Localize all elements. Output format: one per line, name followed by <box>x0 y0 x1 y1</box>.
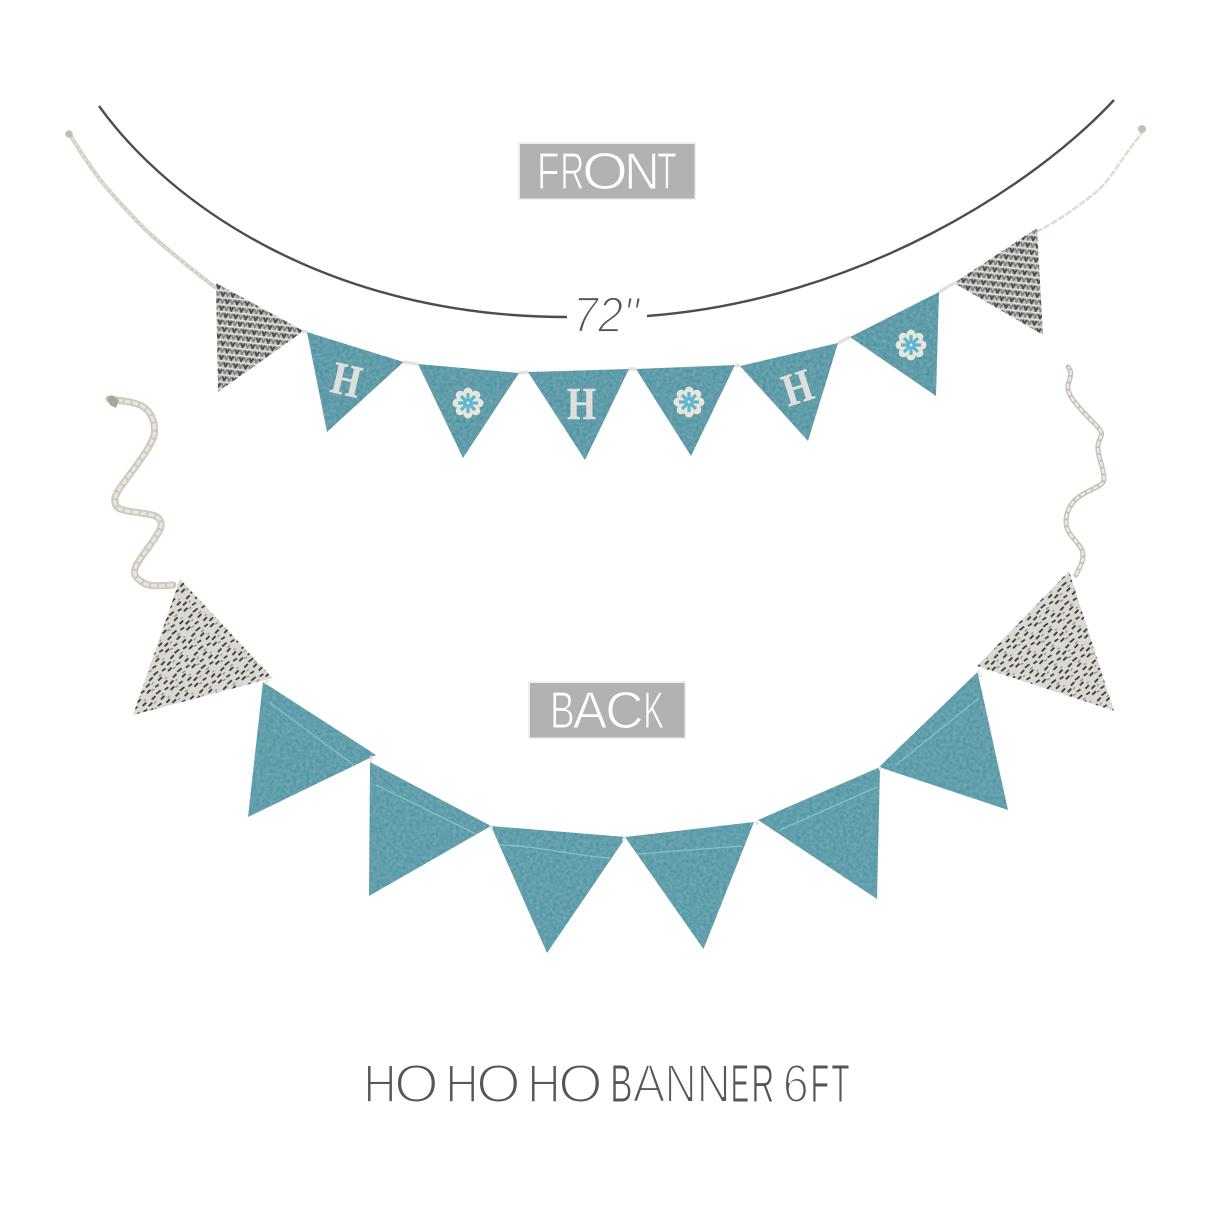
product title: E <box>731 1054 749 1114</box>
front pennant: H: H <box>567 378 596 429</box>
product title: H <box>527 1054 561 1114</box>
front pennant: flower <box>850 292 939 396</box>
product title: T <box>831 1054 850 1114</box>
front pennant: H: H <box>776 359 819 416</box>
label: front <box>518 142 696 201</box>
front hanging cord right <box>1036 133 1142 232</box>
product title: O <box>558 1054 603 1114</box>
product title: H <box>363 1054 397 1114</box>
product title: H <box>445 1054 479 1114</box>
label: back <box>528 681 686 740</box>
product title: F <box>810 1054 829 1114</box>
product title: 6 <box>783 1054 809 1114</box>
front pennant: left tweed <box>216 283 304 392</box>
back pennant 3 <box>491 826 626 953</box>
front hanging cord left <box>69 133 216 288</box>
label: front: T <box>657 143 677 201</box>
connecting cord <box>303 283 954 373</box>
back pennant 2 <box>369 762 491 896</box>
back pennant: right tweed <box>977 571 1114 711</box>
back cord knot left <box>107 395 119 408</box>
front cord knots <box>65 125 1146 138</box>
back hanging cord right <box>1066 367 1104 575</box>
back hanging cord left <box>109 399 173 586</box>
front pennant: H <box>740 343 838 441</box>
label: front: N <box>624 143 660 201</box>
front pennant: H <box>528 369 629 460</box>
product title: O <box>394 1054 439 1114</box>
front pennant: H: H <box>327 352 367 408</box>
front pennant: H <box>307 332 404 432</box>
front pennant: flower <box>418 364 519 458</box>
dimension text: 72" <box>573 287 641 343</box>
product title: N <box>696 1054 731 1114</box>
back banner <box>107 367 1114 953</box>
label: back: K <box>644 682 664 740</box>
label: back: B <box>550 682 575 740</box>
label: front: R <box>560 143 584 201</box>
back pennant 1 <box>248 682 376 817</box>
back pennant 6 <box>879 672 1008 810</box>
label: front: F <box>537 143 559 201</box>
connecting stitches <box>265 671 981 841</box>
product title: B <box>610 1054 632 1114</box>
product title: N <box>665 1054 697 1114</box>
label: back: C <box>605 682 644 740</box>
back pennant: left tweed <box>133 579 272 715</box>
product title: O <box>476 1054 521 1114</box>
product title: R <box>751 1054 774 1114</box>
label: back: A <box>573 682 608 740</box>
back pennant 4 <box>625 822 754 949</box>
front pennant: right tweed <box>954 228 1043 335</box>
label: front: O <box>582 143 628 201</box>
measurement arc with 72 inch label <box>99 100 1114 343</box>
front banner <box>65 125 1146 460</box>
product title: A <box>633 1054 665 1114</box>
back pennant 5 <box>758 767 880 899</box>
front pennant: flower <box>636 365 735 456</box>
